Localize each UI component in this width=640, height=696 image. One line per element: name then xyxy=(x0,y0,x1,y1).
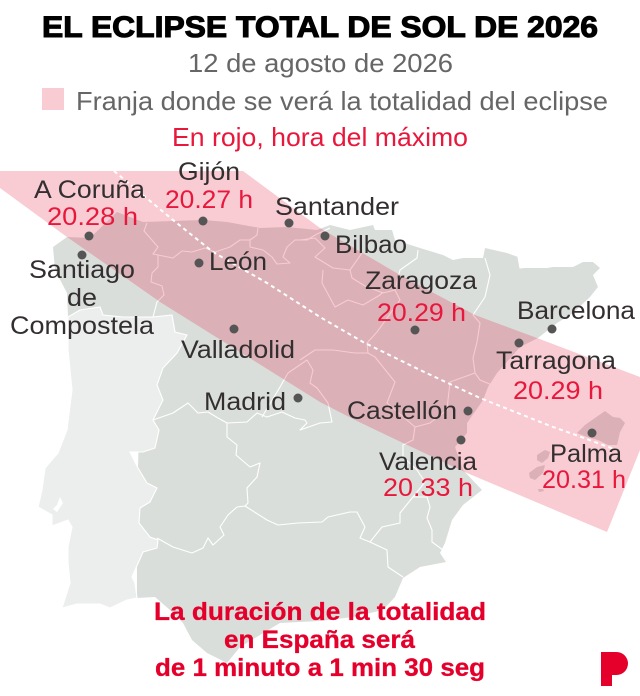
label: Valencia: Valencia xyxy=(379,448,477,476)
title: EL ECLIPSE TOTAL DE SOL DE 2026 xyxy=(42,11,598,44)
label: Santiago de Compostela: Santiago xyxy=(29,256,135,284)
regional borders xyxy=(144,223,528,577)
subtitle: 12 de agosto de 2026 xyxy=(188,48,453,78)
label: Zaragoza xyxy=(365,267,477,327)
icon: publisher logo P xyxy=(601,652,628,686)
label: Valencia: 20.33 h xyxy=(383,474,473,502)
label: Zaragoza: 20.29 h xyxy=(377,299,466,327)
label: A Coruña: A Coruña xyxy=(34,176,145,204)
label: Madrid: Madrid xyxy=(204,388,286,416)
note: red time: En rojo, hora del máximo xyxy=(172,122,468,152)
legend swatch xyxy=(42,88,64,110)
label: Tarragona: Tarragona xyxy=(496,347,616,375)
label: Castellón: Castellón xyxy=(347,397,457,425)
callout: duration of totality: de 1 minuto a 1 min 30 seg xyxy=(155,654,485,682)
label: Valladolid: Valladolid xyxy=(181,336,295,364)
label: Tarragona xyxy=(496,347,616,405)
callout: duration of totality: en España será xyxy=(224,626,415,654)
label: Bilbao: Bilbao xyxy=(335,231,407,259)
label: Zaragoza: Zaragoza xyxy=(365,267,477,295)
islands: Balearic xyxy=(529,411,625,492)
city dots xyxy=(78,216,596,444)
legend xyxy=(42,86,608,116)
label: Valencia xyxy=(379,448,477,502)
label: Gijón: 20.27 h xyxy=(165,186,253,214)
label: Gijón xyxy=(165,158,253,214)
label: Gijón: Gijón xyxy=(178,158,240,186)
map of Iberian peninsula xyxy=(38,212,625,663)
estuary xyxy=(53,497,63,512)
label: León: León xyxy=(209,248,267,276)
label: Palma: Palma xyxy=(550,440,622,468)
label: Santiago de Compostela: Compostela xyxy=(10,312,154,340)
label: Tarragona: 20.29 h xyxy=(513,377,603,405)
label: Palma xyxy=(542,440,626,494)
callout: duration of totality xyxy=(154,598,486,682)
label: Santander: Santander xyxy=(275,193,399,221)
label: Santiago de Compostela xyxy=(10,256,154,340)
label: A Coruña: 20.28 h xyxy=(47,203,138,231)
eclipse totality band xyxy=(0,171,640,532)
land: Spain xyxy=(53,212,600,663)
centre line of totality xyxy=(114,171,622,452)
land: Portugal xyxy=(38,307,187,608)
label: A Coruña xyxy=(34,176,145,231)
legend text: Franja donde se verá la totalidad del eclipse xyxy=(76,86,608,116)
label: Santiago de Compostela: de xyxy=(67,284,97,312)
callout: duration of totality: La duración de la totalidad xyxy=(154,598,486,626)
label: Barcelona: Barcelona xyxy=(517,297,635,325)
label: Palma: 20.31 h xyxy=(542,466,626,494)
